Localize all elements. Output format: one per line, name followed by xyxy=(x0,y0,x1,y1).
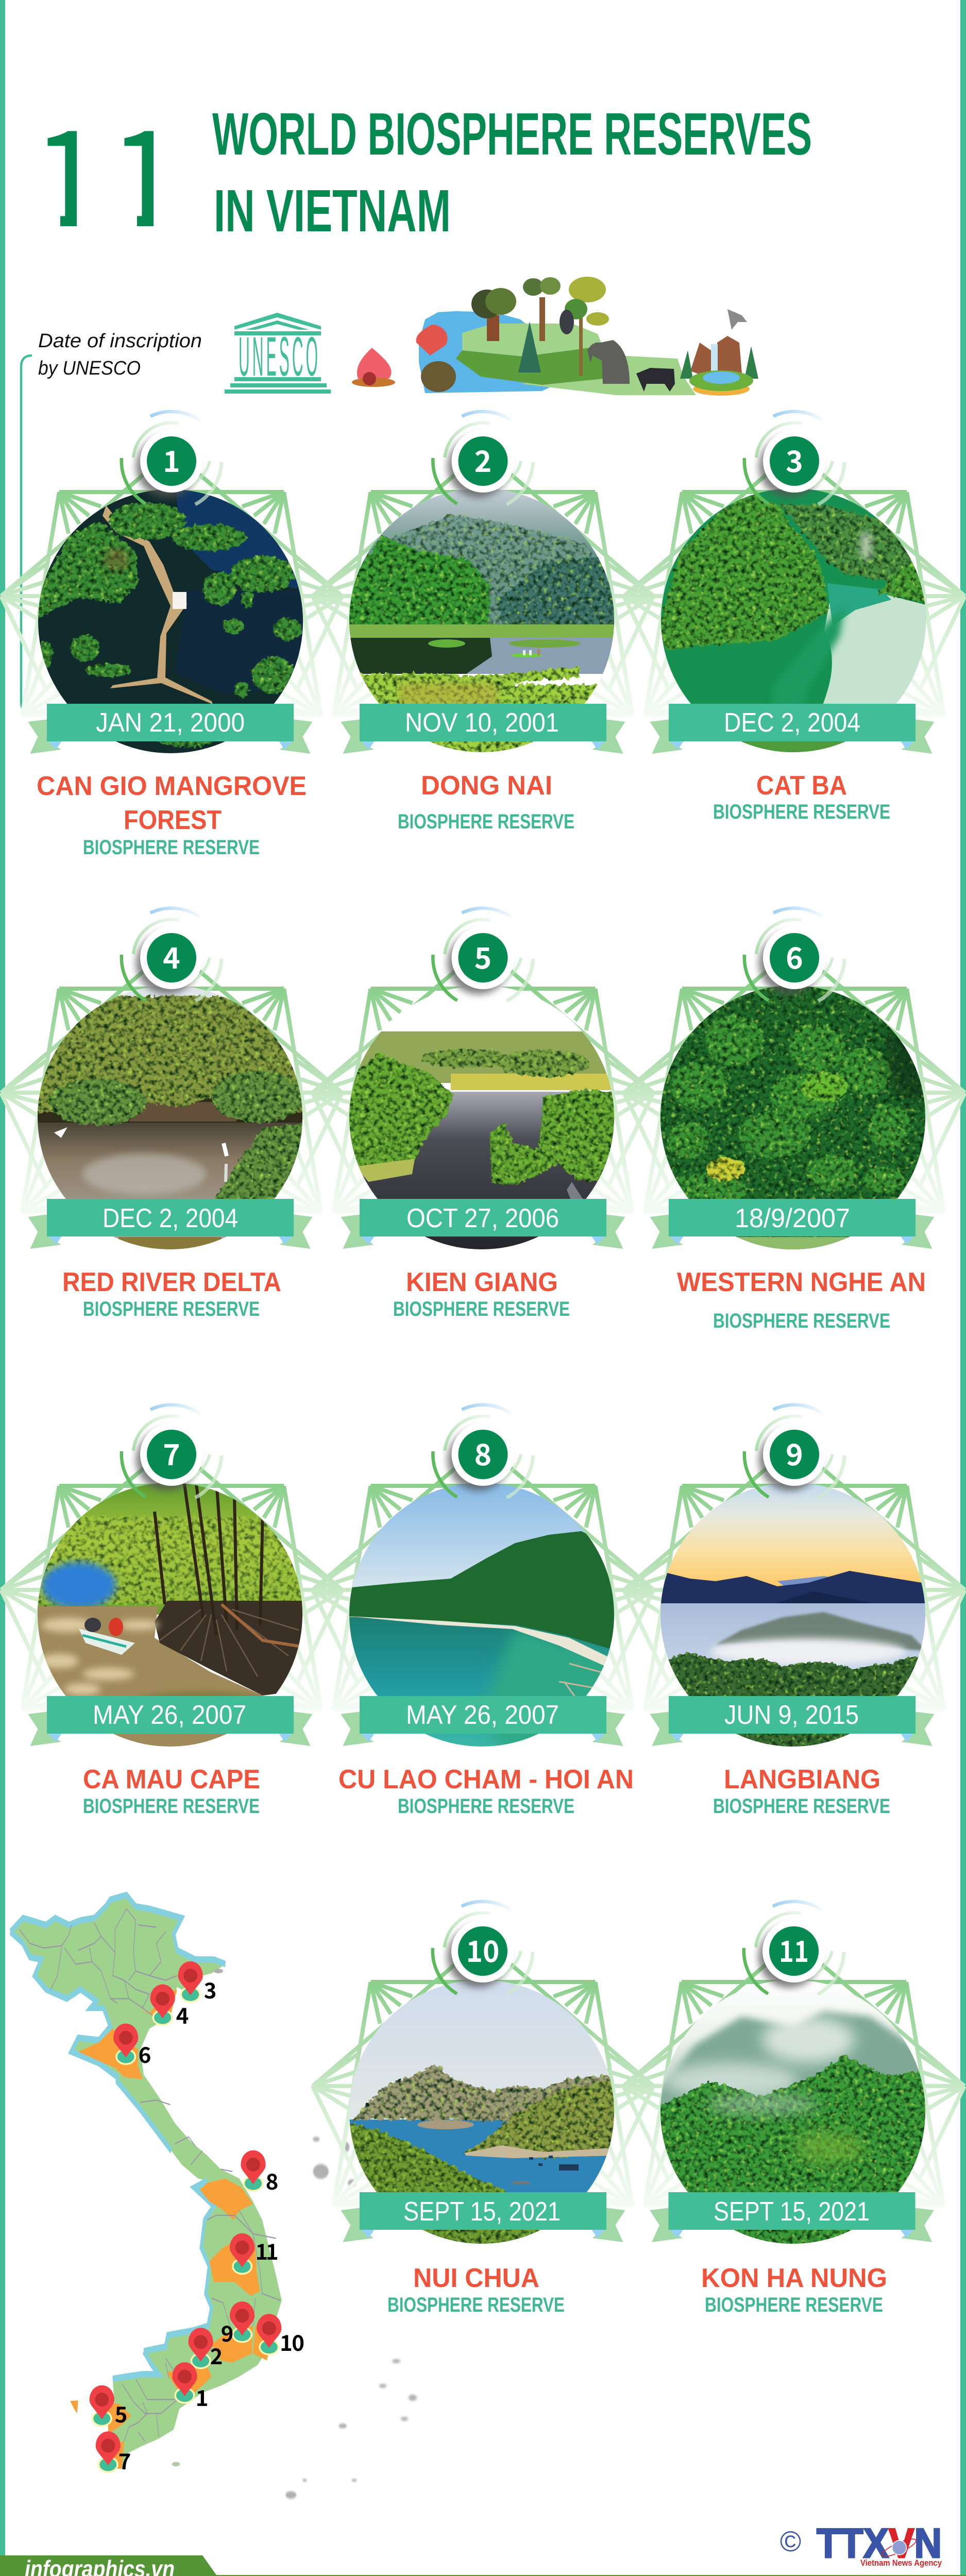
date bar 8 xyxy=(360,1696,606,1734)
map pin numbers: 1 xyxy=(196,2381,208,2413)
name 3: CAT BA xyxy=(756,771,847,801)
photo 5: wetland river xyxy=(347,986,617,1251)
photo 2: lake and misty forest xyxy=(347,486,617,754)
decorative frame 7 xyxy=(1,1468,342,1709)
decorative frame 6 xyxy=(624,971,965,1212)
number badge 6: 6 xyxy=(786,935,803,977)
panel: reserve 8 Cu Lao Cham xyxy=(312,1405,653,1818)
number badge 4: 4 xyxy=(163,935,180,977)
ribbon tails 7 xyxy=(28,1711,312,1746)
date bar 6 xyxy=(669,1199,916,1236)
date 10: SEPT 15, 2021 xyxy=(403,2197,561,2227)
ribbon tails 1 xyxy=(28,719,312,754)
number badge 5: 5 xyxy=(474,935,492,977)
map of Vietnam with reserve pins xyxy=(10,1895,357,2499)
date 2: NOV 10, 2001 xyxy=(405,708,559,738)
map pin numbers: 4 xyxy=(176,1999,189,2030)
panel: reserve 11 Kon Ha Nung xyxy=(623,1902,964,2316)
photo 11: misty rainforest xyxy=(658,1978,928,2247)
decorative frame 9 xyxy=(624,1468,965,1709)
date bar 5 xyxy=(360,1199,606,1236)
number badge 1: 1 xyxy=(163,438,180,481)
date 1: JAN 21, 2000 xyxy=(96,708,245,738)
date bar 9 xyxy=(669,1696,916,1734)
date 7: MAY 26, 2007 xyxy=(93,1700,246,1730)
badge rings 3 xyxy=(744,412,844,504)
date bar 4 xyxy=(47,1199,294,1236)
subtitle 4: BIOSPHERE RESERVE xyxy=(83,1298,260,1320)
agency name: Vietnam News Agency xyxy=(860,2558,942,2568)
photo 3: karst and green sea xyxy=(658,486,928,754)
map pin numbers: 6 xyxy=(139,2038,151,2070)
badge rings 7 xyxy=(122,1405,222,1498)
number badge 7: 7 xyxy=(163,1432,180,1474)
date bar 11 xyxy=(669,2192,915,2230)
date bar 2 xyxy=(360,704,606,741)
name 7: CA MAU CAPE xyxy=(83,1765,260,1794)
date 6: 18/9/2007 xyxy=(735,1204,850,1233)
subtitle 7: BIOSPHERE RESERVE xyxy=(83,1795,260,1818)
ribbon tails 11 xyxy=(650,2208,934,2242)
panel: reserve 2 Dong Nai xyxy=(312,412,653,833)
subtitle 10: BIOSPHERE RESERVE xyxy=(387,2294,565,2316)
decorative frame 2 xyxy=(312,474,653,716)
logo: copyright and TTXVN xyxy=(780,2520,942,2568)
number badge 3: 3 xyxy=(786,438,803,481)
decorative frame 10 xyxy=(312,1964,653,2206)
date bar 3 xyxy=(669,704,916,741)
title xyxy=(212,100,812,244)
photo 9: sunrise over fog and pines xyxy=(658,1481,928,1750)
panel: reserve 7 Ca Mau Cape xyxy=(1,1405,342,1818)
legend: date of inscription by UNESCO xyxy=(38,330,202,379)
date 4: DEC 2, 2004 xyxy=(103,1204,238,1233)
ribbon tails 8 xyxy=(341,1711,625,1746)
photo 7: mangrove canal with boat xyxy=(35,1481,305,1749)
decorative frame 5 xyxy=(312,971,653,1212)
badge rings 1 xyxy=(122,412,222,504)
panel: reserve 3 Cat Ba xyxy=(624,412,965,823)
subtitle 6: BIOSPHERE RESERVE xyxy=(713,1310,890,1332)
decorative frame 3 xyxy=(624,474,965,716)
panel: reserve 10 Nui Chua xyxy=(312,1902,653,2316)
subtitle 11: BIOSPHERE RESERVE xyxy=(705,2294,883,2316)
date 5: OCT 27, 2006 xyxy=(406,1204,559,1233)
date bar 7 xyxy=(47,1696,294,1734)
map pin numbers: 2 xyxy=(210,2340,223,2371)
photo 4: mangrove and egrets xyxy=(35,984,305,1251)
badge rings 8 xyxy=(433,1405,533,1498)
panel: reserve 5 Kien Giang xyxy=(312,908,653,1320)
subtitle 5: BIOSPHERE RESERVE xyxy=(393,1298,570,1320)
date bar 1 xyxy=(47,704,294,741)
name 11: KON HA NUNG xyxy=(701,2263,887,2293)
footer bar xyxy=(0,2555,966,2576)
photo 10: rocky coast and blue bay xyxy=(347,1978,617,2247)
icon: UNESCO temple logo: UNESCO xyxy=(239,325,318,387)
name 4: RED RIVER DELTA xyxy=(62,1267,281,1297)
number badge 10: 10 xyxy=(466,1928,500,1971)
ribbon tails 5 xyxy=(341,1214,625,1249)
photo 6: dense forest mountain xyxy=(658,982,937,1252)
badge rings 9 xyxy=(744,1405,844,1498)
icon: UNESCO temple logo xyxy=(225,313,331,394)
globe and orbit xyxy=(880,2536,918,2560)
badge rings 6 xyxy=(744,908,844,1001)
ribbon tails 10 xyxy=(341,2208,625,2242)
left border xyxy=(0,0,5,2576)
map pin numbers: 11 xyxy=(256,2235,278,2266)
legend: date of inscription by UNESCO: by UNESCO xyxy=(38,358,141,379)
offshore islands xyxy=(379,2359,417,2421)
name 1 line 2: FOREST xyxy=(124,805,222,835)
panel: reserve 9 Langbiang xyxy=(624,1405,965,1818)
subtitle 8: BIOSPHERE RESERVE xyxy=(398,1795,574,1818)
badge rings 2 xyxy=(433,412,533,504)
panel: reserve 6 Western Nghe An xyxy=(624,908,965,1332)
photo 1: mangrove aerial xyxy=(36,487,304,755)
legend: date of inscription by UNESCO: Date of inscription xyxy=(38,330,202,352)
big number 11: 1 xyxy=(31,72,106,265)
map pin numbers: 8 xyxy=(266,2165,278,2196)
date bar 10 xyxy=(360,2192,606,2230)
number badge 11: 11 xyxy=(779,1928,809,1971)
map pin numbers xyxy=(115,1974,304,2476)
decorative frame 8 xyxy=(312,1468,653,1709)
map pin numbers: 9 xyxy=(221,2317,233,2348)
name 5: KIEN GIANG xyxy=(406,1267,558,1297)
panel: reserve 1 Can Gio xyxy=(1,412,342,859)
name 2: DONG NAI xyxy=(421,771,552,801)
photo 8: green hill and turquoise bay xyxy=(347,1481,617,1749)
icon: nature collage with trees and animals xyxy=(352,277,758,396)
big number 11 xyxy=(47,131,154,226)
badge rings 10 xyxy=(433,1902,533,1994)
legend connector line xyxy=(21,355,49,715)
badge rings 5 xyxy=(433,908,533,1001)
decorative frame 4 xyxy=(1,971,342,1212)
name 8: CU LAO CHAM - HOI AN xyxy=(338,1765,634,1794)
decorative frame 1 xyxy=(1,474,342,716)
name 9: LANGBIANG xyxy=(724,1765,880,1794)
date 11: SEPT 15, 2021 xyxy=(714,2197,870,2227)
badge rings 4 xyxy=(122,908,222,1001)
title line 2: IN VIETNAM xyxy=(214,177,451,244)
badge rings 11 xyxy=(744,1902,844,1994)
name 1 line 1: CAN GIO MANGROVE xyxy=(37,771,307,801)
number badge 9: 9 xyxy=(786,1432,803,1474)
map pin numbers: 5 xyxy=(115,2398,127,2429)
big number 11: 1 xyxy=(108,72,182,265)
name 10: NUI CHUA xyxy=(413,2263,539,2293)
map pin numbers: 7 xyxy=(118,2445,131,2476)
date 8: MAY 26, 2007 xyxy=(406,1700,559,1730)
map pin numbers: 10 xyxy=(280,2326,304,2358)
decorative frame 11 xyxy=(623,1964,964,2206)
subtitle 1: BIOSPHERE RESERVE xyxy=(83,836,260,859)
map land, regions, borders xyxy=(10,1895,357,2499)
name 6: WESTERN NGHE AN xyxy=(677,1267,926,1297)
ribbon tails 2 xyxy=(341,719,625,754)
date 9: JUN 9, 2015 xyxy=(724,1700,859,1730)
subtitle 3: BIOSPHERE RESERVE xyxy=(713,801,890,823)
map pin numbers: 3 xyxy=(204,1974,216,2005)
subtitle 9: BIOSPHERE RESERVE xyxy=(713,1795,890,1818)
number badge 2: 2 xyxy=(474,438,492,481)
number badge 8: 8 xyxy=(474,1432,492,1474)
subtitle 2: BIOSPHERE RESERVE xyxy=(398,810,574,833)
panel: reserve 4 Red River Delta xyxy=(1,908,342,1320)
ribbon tails 3 xyxy=(650,719,935,754)
ribbon tails 6 xyxy=(650,1214,935,1249)
TTXVN wordmark: TTXVN xyxy=(817,2520,942,2567)
date 3: DEC 2, 2004 xyxy=(724,708,860,738)
ribbon tails 9 xyxy=(650,1711,935,1746)
ribbon tails 4 xyxy=(28,1214,312,1249)
copyright symbol: © xyxy=(780,2525,801,2557)
right border xyxy=(960,0,966,2576)
